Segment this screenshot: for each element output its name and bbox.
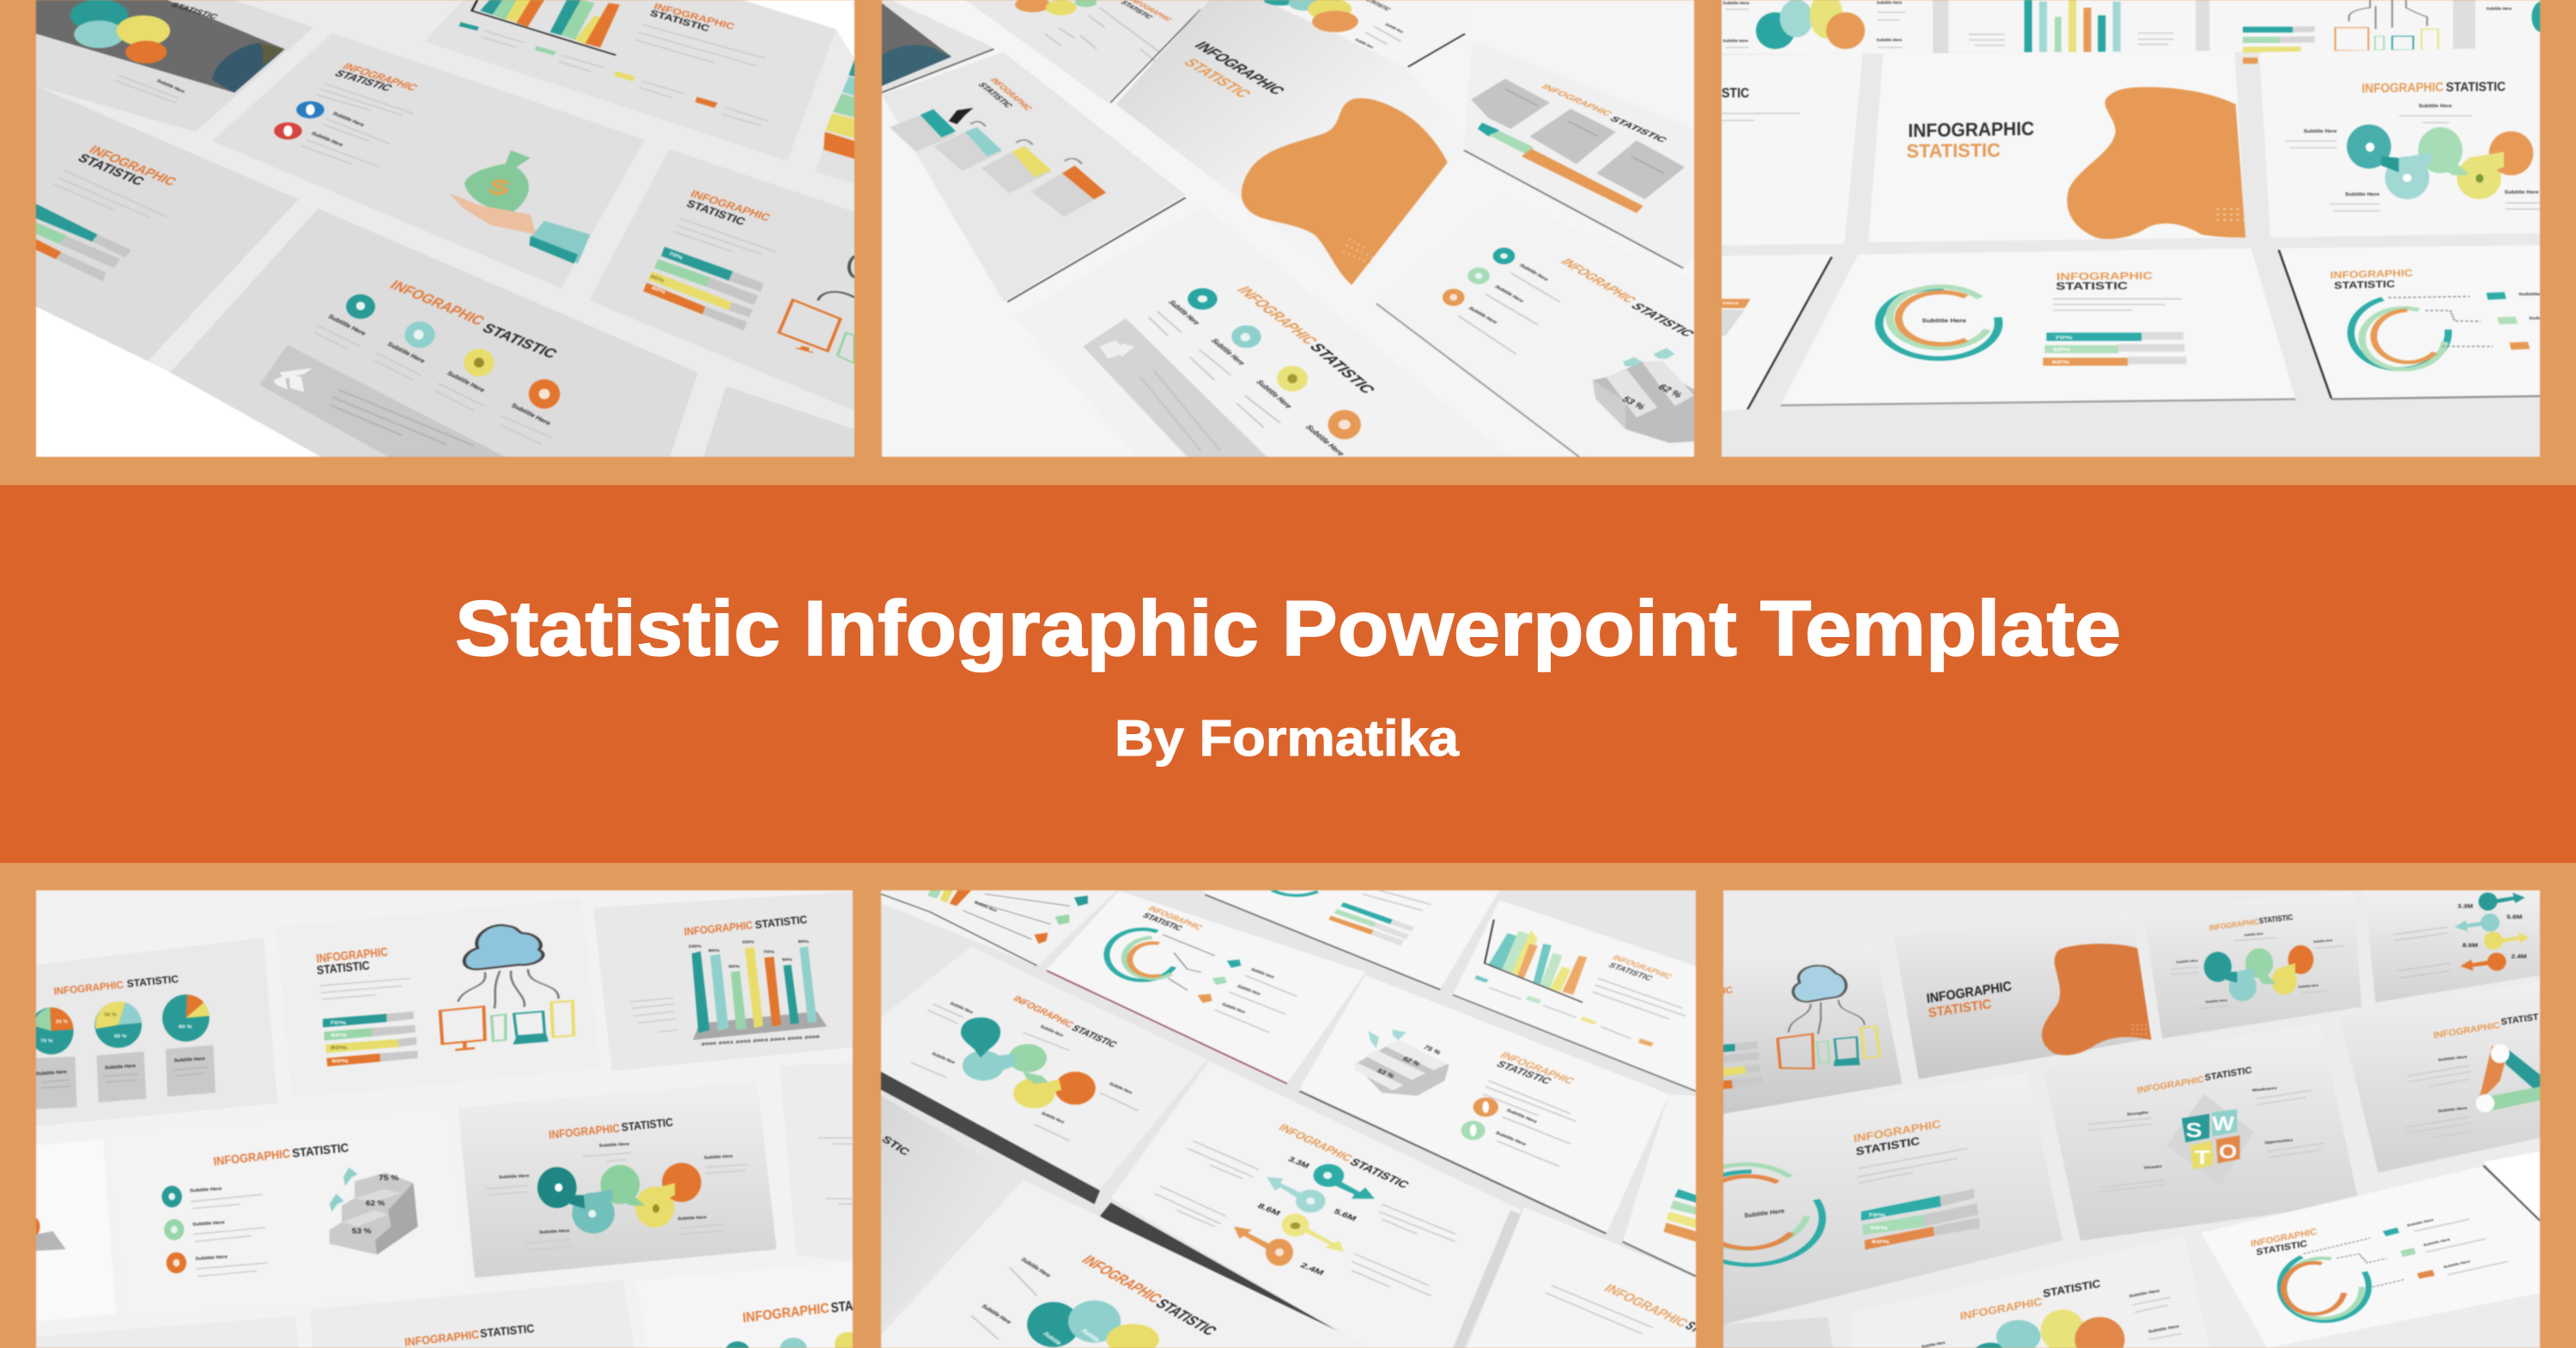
slide: bottom row: STATISTIC	[479, 1322, 535, 1340]
slide: venn row top left: Subtitle Here	[1876, 1, 1902, 5]
slide: icons and stairs: Subtitle Here	[190, 1186, 222, 1193]
slide: icons and stairs: Subtitle Here	[1466, 307, 1499, 325]
shape: orange blob	[1242, 98, 1448, 285]
slide: four-step staircase: INFOGRAPHIC	[987, 77, 1034, 112]
slide: cover with blob	[1868, 51, 2245, 242]
slide: 3D bar chart: 90%	[798, 940, 810, 944]
slide: ring with leader lines: STATISTIC	[2256, 1238, 2308, 1258]
slide: stairs with person icons: Subtitle Here	[1494, 1132, 1528, 1147]
slide: venn bottom: STATISTIC	[2043, 1278, 2101, 1300]
chart: isometric stairs: 62 %	[1400, 1055, 1422, 1067]
slide: SWOT diamond: W	[2212, 1113, 2235, 1135]
icon: money bag on hand	[449, 150, 590, 264]
panel: top left slide mockups	[35, 0, 855, 458]
chart: isometric stairs: 62 %	[1656, 382, 1686, 399]
slide: progress bars partial: INFOGRAPHIC	[86, 143, 179, 188]
slide: venn row top left	[1722, 0, 1933, 53]
slide: 3D bar chart: 2000 2001 2002 2003 2004 2005 2006	[702, 1035, 820, 1047]
slide: dark image with venn circles: Subtitle Here	[155, 79, 186, 94]
slide: chain of circles diagonal: INFOGRAPHIC	[1011, 994, 1076, 1029]
chart: pie charts: 20 %	[56, 1018, 69, 1024]
slide: progress bars partial: STATISTIC	[75, 151, 148, 188]
chart: progress bars: 60%	[331, 1059, 349, 1064]
slide: four arrows	[1100, 1061, 1522, 1348]
chart: progress bars: 60%	[1872, 1239, 1890, 1244]
chart: progress bars: 80%	[331, 1045, 348, 1050]
icon: money bag on hand: $	[485, 175, 513, 200]
slide: chain of circles: STATISTIC	[2258, 913, 2293, 926]
slide: 3D bar chart: 60%	[782, 958, 793, 962]
slide: chain of circles	[458, 1081, 776, 1278]
slide: arrows upper right: 5.6M	[2506, 914, 2522, 920]
slide: four icons	[1014, 205, 1510, 457]
slide: ring with leaders	[1047, 891, 1365, 1084]
slide: venn top	[1264, 0, 1467, 68]
slide: stairs with person icons: STATISTIC	[1493, 1060, 1554, 1086]
slide: column chart right	[1453, 900, 1696, 1091]
chart: progress bars: 60%	[2052, 359, 2070, 365]
slide: three boxes and progress line: INFOGRAPHIC	[1539, 83, 1614, 118]
slide: icons and stairs: INFOGRAPHIC	[1557, 258, 1639, 305]
slide: cover with dark orange blob: STATISTIC	[1928, 996, 1992, 1020]
slide: chain of circles: Subtitle Here	[2176, 959, 2198, 964]
slide: four icons with statistic band: Subtitle Here	[510, 402, 552, 427]
slide: 3D bar chart: STATISTIC	[755, 913, 808, 931]
slide: three boxes and progress line	[1464, 39, 1694, 268]
slide: cloud and devices	[276, 898, 600, 1098]
banner: title band	[0, 485, 2576, 863]
slide: icons and stairs	[1376, 197, 1698, 457]
slide: four-step staircase: STATISTIC	[975, 82, 1014, 109]
slide: four icons with statistic band: Subtitle Here	[386, 341, 427, 365]
slide: cover with dark orange blob: INFOGRAPHIC	[1926, 979, 2013, 1006]
slide: icons and stairs	[106, 1108, 472, 1317]
slide: SWOT diamond: Threats	[2143, 1164, 2162, 1170]
slide: venn row top left: Subtitle Here	[1722, 2, 1750, 5]
slide: ring with dotted leaders	[2279, 246, 2540, 399]
slide: left blank title	[1722, 53, 1862, 246]
slide: bars and devices: STATISTIC	[684, 198, 747, 228]
slide: chain of circles: STATISTIC	[621, 1116, 673, 1134]
slide: 3D bar chart: 100%	[689, 944, 702, 949]
chart: isometric stairs: 53 %	[1619, 395, 1649, 411]
slide: SWOT diamond: STATISTIC	[2204, 1065, 2252, 1083]
slide: chain of circles diagonal	[881, 947, 1206, 1204]
slide: three pie charts: Subtitle Here	[174, 1056, 205, 1063]
slide: bars and devices: 80%	[649, 273, 666, 284]
chart: isometric stairs	[1354, 1029, 1449, 1096]
slide: venn top: Subtitle Here	[1352, 39, 1375, 49]
slide: three pie charts: Subtitle Here	[36, 1069, 67, 1077]
panel: bottom right slide mockups	[1722, 890, 2541, 1348]
slide: ring with leaders: Subtitle Here	[1249, 968, 1275, 980]
chart: progress bars: 70%	[2055, 334, 2073, 340]
icon: monitor	[440, 1001, 574, 1050]
slide: chain of circles diagonal: Subtitle Here	[1108, 1082, 1133, 1096]
slide: four icons: Subtitle Here	[1254, 380, 1295, 409]
slide: right edge bars	[1623, 1094, 1696, 1277]
slide: venn bottom left: Subtitle	[1041, 1331, 1065, 1346]
slide: chain of circles: Subtitle Here	[2419, 102, 2452, 108]
slide: four arrows: STATISTIC	[1346, 1157, 1412, 1191]
slide: chain of circles: Subtitle Here	[499, 1173, 529, 1180]
chart: progress bars: 50%	[1870, 1224, 1888, 1230]
chart: pie charts	[29, 994, 210, 1054]
slide: SWOT diamond	[2044, 1023, 2359, 1241]
slide: four icons with statistic band: STATISTIC	[479, 321, 560, 361]
slide: SWOT diamond: Opportunities	[2265, 1138, 2293, 1145]
slide: four icons: Subtitle Here	[1166, 300, 1202, 325]
chart: isometric stairs: 53 %	[352, 1227, 372, 1236]
slide: lower right title	[1467, 1207, 1704, 1348]
slide: triangle diagram	[2340, 981, 2540, 1173]
slide: venn top: Subtitle Here	[1383, 23, 1405, 33]
slide: dark image with venn circles	[36, 0, 313, 132]
slide: icons and stairs: Subtitle Here	[1517, 264, 1551, 282]
chart: isometric stairs	[330, 1168, 418, 1254]
slide: cloud and devices: STATISTIC	[316, 959, 370, 977]
slide: venn bottom: Subtitle Here	[2129, 1289, 2160, 1298]
chart: progress bars	[323, 1011, 418, 1066]
slide: column chart right: INFOGRAPHIC	[1610, 954, 1674, 981]
slide: corner top right	[2483, 1151, 2540, 1221]
slide: ring with leader lines	[2201, 1167, 2540, 1348]
slide: SWOT diamond: INFOGRAPHIC	[2136, 1074, 2204, 1096]
slide: venn bottom	[1852, 1236, 2209, 1348]
slide: four arrows: 2.4M	[1298, 1261, 1326, 1278]
slide: dark image with venn circles: STATISTIC	[168, 1, 221, 21]
slide: chain of circles diagonal: Subtitle Here	[1040, 1112, 1066, 1125]
chart: four arrow keys	[1234, 1164, 1375, 1266]
chart: isometric stairs: 53 %	[1376, 1067, 1396, 1079]
slide: bars and devices: INFOGRAPHIC	[689, 189, 772, 224]
slide: ring and bars	[1679, 1073, 2063, 1325]
slide: four arrows: 5.6M	[1332, 1207, 1358, 1223]
slide: chain of circles: Subtitle Here	[704, 1153, 732, 1160]
slide: four icons: Subtitle Here	[1209, 337, 1248, 366]
title: Statistic Infographic Powerpoint Template	[455, 586, 2121, 672]
slide: SWOT diamond: O	[2219, 1141, 2237, 1163]
slide: icons and stairs: Subtitle Here	[1492, 285, 1526, 303]
chart: pie charts: 60 %	[114, 1033, 127, 1039]
slide: partial left lower: Here	[1722, 301, 1739, 306]
chart: isometric stairs: 62 %	[366, 1199, 385, 1207]
slide: chain of circles	[2143, 891, 2361, 1039]
slide: chain of circles: Subtitle Here	[539, 1228, 569, 1235]
slide: chain of circles: INFOGRAPHIC	[2362, 80, 2444, 95]
slide: lower left blank	[1723, 1317, 1833, 1348]
slide: ring with dotted leaders: STATISTIC	[2334, 278, 2395, 291]
panel: bottom left slide mockups	[35, 890, 854, 1348]
slide: venn bottom: INFOGRAPHIC	[1959, 1296, 2043, 1322]
slide: 3D bar chart: 80%	[708, 949, 720, 953]
slide: bottom row	[36, 1261, 861, 1348]
slide: four-step staircase	[882, 52, 1186, 302]
slide: 3D bar chart: 50%	[728, 965, 740, 968]
slide: four icons: STATISTIC	[1305, 342, 1380, 395]
chart: cropped ring chart	[1679, 1164, 1822, 1265]
slide: ring with leaders: Subtitle Here	[1236, 985, 1261, 997]
panel: top right slide mockups	[1721, 0, 2541, 458]
slide: three boxes and progress line: STATISTIC	[1607, 116, 1669, 144]
slide: four arrows: 3.3M	[1286, 1156, 1311, 1170]
slide: ring with leader lines: INFOGRAPHIC	[2251, 1226, 2318, 1249]
slide: chain of circles: Subtitle Here	[2206, 999, 2227, 1005]
slide: venn bottom left: Subtitle Here	[980, 1303, 1013, 1325]
slide: four icons with statistic band: INFOGRAPHIC	[386, 278, 488, 328]
slide: stairs with person icons: INFOGRAPHIC	[1498, 1050, 1577, 1086]
chart: pie charts: 70 %	[40, 1038, 53, 1043]
slide: ring with leader lines: Subtitle Here	[2423, 1238, 2451, 1248]
subtitle: By Formatika	[1115, 710, 1460, 767]
slide: stacked bands at edge	[815, 58, 854, 184]
chart: cropped ring chart: Subtitle Here	[1744, 1208, 1785, 1219]
slide: ring with dotted leaders: INFOGRAPHIC	[2330, 267, 2413, 281]
slide: lower left blank	[879, 1096, 1018, 1327]
slide: ring with leader lines: Subtitle Here	[2444, 1260, 2470, 1269]
slide: column chart row top	[1933, 0, 2209, 89]
slide: bars and devices	[589, 149, 854, 410]
slide: arrows upper right	[2365, 890, 2540, 1002]
slide: venn row top left: Subtitle Here	[1876, 38, 1902, 42]
slide: venn columns top	[965, 0, 1209, 103]
panel: top centre slide mockups	[881, 0, 1695, 458]
slide: four icons with statistic band: Subtitle Here	[326, 313, 368, 337]
chart: ring chart: Subtitle Here	[1922, 318, 1966, 324]
slide: money bag in hand: Subtitle Here	[310, 131, 344, 148]
slide: cover with orange blob: STATISTIC	[1180, 57, 1255, 100]
slide: bars and cloud row top: Subtitle Here	[2486, 7, 2512, 11]
panel: bottom centre slide mockups	[880, 890, 1697, 1348]
slide: column chart: INFOGRAPHIC	[653, 1, 736, 32]
slide: triangle diagram: Subtitle Here	[2438, 1055, 2468, 1062]
chart: ring chart	[1879, 287, 1999, 359]
slide: three pie charts: STATISTIC	[126, 973, 179, 990]
slide: venn bottom left: INFOGRAPHIC	[1078, 1253, 1166, 1306]
slide: three pie charts: Subtitle Here	[105, 1063, 136, 1071]
slide: SWOT diamond: S	[2185, 1120, 2202, 1142]
slide: ring and bars: INFOGRAPHIC	[1853, 1118, 1941, 1145]
slide: progress bars partial	[36, 86, 299, 361]
slide: partial left middle	[29, 1139, 116, 1321]
slide: icons and stairs: Subtitle Here	[192, 1219, 225, 1227]
slide: venn columns top: STATISTIC	[1119, 0, 1155, 20]
chart: isometric stairs: 75 %	[379, 1174, 399, 1181]
slide: arrows upper right: 8.6M	[2463, 943, 2478, 948]
chart: pie charts: 30 %	[104, 1011, 117, 1017]
slide: four icons: Subtitle Here	[1303, 424, 1347, 457]
slide: chain of circles: Subtitle Here	[2298, 984, 2318, 989]
slide: triangle diagram: Subtitle Here	[2438, 1106, 2468, 1114]
slide: cover with orange blob	[1116, 0, 1467, 285]
chart: progress bars: 70%	[1868, 1212, 1886, 1217]
slide: venn row top left: Subtitle Here	[1722, 39, 1748, 43]
slide: chain of circles diagonal: STATISTIC	[1069, 1023, 1120, 1049]
slide: icons and stairs: Subtitle Here	[196, 1254, 228, 1261]
slide: dark image corner	[882, 0, 993, 93]
slide: chain of circles: INFOGRAPHIC	[2208, 917, 2260, 932]
slide: icons and stairs: INFOGRAPHIC	[213, 1147, 291, 1169]
slide: four icons with statistic band	[170, 209, 698, 457]
slide: SWOT diamond: Strengths	[2127, 1110, 2149, 1117]
slide: ring with leaders: STATISTIC	[1140, 912, 1184, 932]
slide: column chart right: STATISTIC	[1607, 962, 1655, 982]
slide: bars and devices: 70%	[668, 250, 684, 261]
slide: SWOT diamond: T	[2195, 1147, 2210, 1169]
slide: money bag in hand	[212, 33, 645, 288]
slide: leader lines with badges: Subtitle Here	[973, 901, 998, 914]
slide: arrows upper right: 2.4M	[2511, 954, 2527, 960]
chart: progress bars: 60%	[331, 1033, 348, 1038]
slide: chain of circles diagonal: Subtitle Here	[1039, 1025, 1065, 1038]
slide: cover with orange blob: INFOGRAPHIC	[1191, 39, 1290, 97]
slide: cover with dark orange blob	[1894, 912, 2151, 1079]
slide: arrows upper right: 3.3M	[2458, 903, 2473, 909]
slide: venn bottom left: Subtitle Here	[1019, 1256, 1053, 1278]
slide: cover with blob: INFOGRAPHIC	[1908, 118, 2034, 141]
slide: chain of circles	[2259, 47, 2540, 238]
slide: three pie charts: INFOGRAPHIC	[53, 979, 125, 997]
chart: pie charts: 60 %	[179, 1023, 192, 1029]
chart: progress bars: 50%	[2053, 346, 2071, 352]
slide: venn bottom left	[881, 1180, 1374, 1348]
slide: icons and stairs: STATISTIC	[292, 1141, 349, 1160]
slide: left blank title: STIC	[1722, 85, 1749, 100]
slide: cloud and devices	[1722, 944, 1902, 1114]
slide: ring with bars: INFOGRAPHIC	[2057, 270, 2153, 282]
slide: chain of circles: Subtitle Here	[2304, 128, 2337, 134]
slide: four arrows: 8.6M	[1255, 1202, 1282, 1217]
slide: cloud and devices: INFOGRAPHIC	[316, 945, 388, 966]
slide: money bag in hand: STATISTIC	[331, 69, 395, 94]
slide: chain of circles: Subtitle Here	[598, 1141, 629, 1148]
slide: bars and devices: 60%	[650, 284, 667, 295]
slide: four icons with statistic band: Subtitle Here	[446, 370, 487, 393]
chart: isometric stairs: 75 %	[1422, 1044, 1443, 1056]
slide: cover with blob: STATISTIC	[1906, 139, 2001, 161]
slide: chain of circles diagonal: Subtitle Here	[948, 1002, 975, 1015]
slide: lower right blank	[703, 386, 854, 457]
slide: leader lines with badges	[881, 890, 1116, 966]
chart: progress bars	[1862, 1189, 1980, 1250]
slide: SWOT diamond: Weakness	[2252, 1086, 2277, 1093]
slide: 3D bar chart: 70%	[763, 950, 775, 954]
slide: ring with bars: STATISTIC	[2056, 280, 2128, 292]
slide: four icons: INFOGRAPHIC	[1233, 285, 1321, 346]
icon: cloud	[465, 925, 544, 969]
slide: ring and bars: STATISTIC	[1856, 1135, 1920, 1157]
icon: cloud	[1793, 966, 1846, 1002]
slide: faint right	[780, 1063, 853, 1261]
chart: progress bars	[2043, 332, 2186, 366]
slide: venn bottom left: Subtitle	[1079, 1328, 1103, 1343]
slide: chain of circles: Subtitle Here	[2313, 938, 2333, 944]
slide: ring with leader lines: Subtitle Here	[2407, 1218, 2433, 1228]
slide: ring with bars	[1781, 248, 2295, 405]
slide: ring with leaders: Subtitle Here	[1220, 1003, 1247, 1015]
shape: orange blob	[2067, 87, 2245, 239]
slide: bars and cloud row top	[2209, 0, 2552, 64]
slide: ring with leaders: INFOGRAPHIC	[1145, 905, 1205, 932]
slide: partial left lower	[1722, 254, 1833, 410]
chart: isometric stairs	[1593, 348, 1694, 443]
chart: progress bars: 70%	[330, 1020, 346, 1025]
slide: chain of circles: Subtitle Here	[677, 1214, 707, 1221]
slide: chain of circles: Subtitle Here	[2345, 191, 2379, 197]
slide: stairs with person icons	[1300, 975, 1669, 1234]
slide: 3D bar chart: INFOGRAPHIC	[683, 919, 753, 938]
slide: money bag in hand: Subtitle Here	[331, 111, 366, 128]
slide: four arrows: INFOGRAPHIC	[1275, 1122, 1355, 1164]
slide: column chart: STATISTIC	[648, 8, 711, 33]
slide: 3D bar chart	[593, 891, 853, 1071]
slide: money bag in hand: INFOGRAPHIC	[339, 62, 420, 93]
slide: venn bottom: Subtitle Here	[2148, 1324, 2179, 1334]
slide: 3D bar chart: 100%	[742, 940, 755, 944]
slide: chain of circles: Subtitle Here	[2245, 932, 2263, 938]
shape: orange blob	[2042, 944, 2151, 1055]
slide: column chart	[424, 0, 836, 161]
slide: ring and bars upper	[1204, 890, 1499, 990]
slide: chain of circles: INFOGRAPHIC	[548, 1122, 620, 1142]
slide: chain of circles diagonal: Subtitle Here	[930, 1052, 957, 1066]
slide: stairs with person icons: Subtitle Here	[1505, 1108, 1539, 1124]
slide: three pie charts	[29, 938, 277, 1126]
